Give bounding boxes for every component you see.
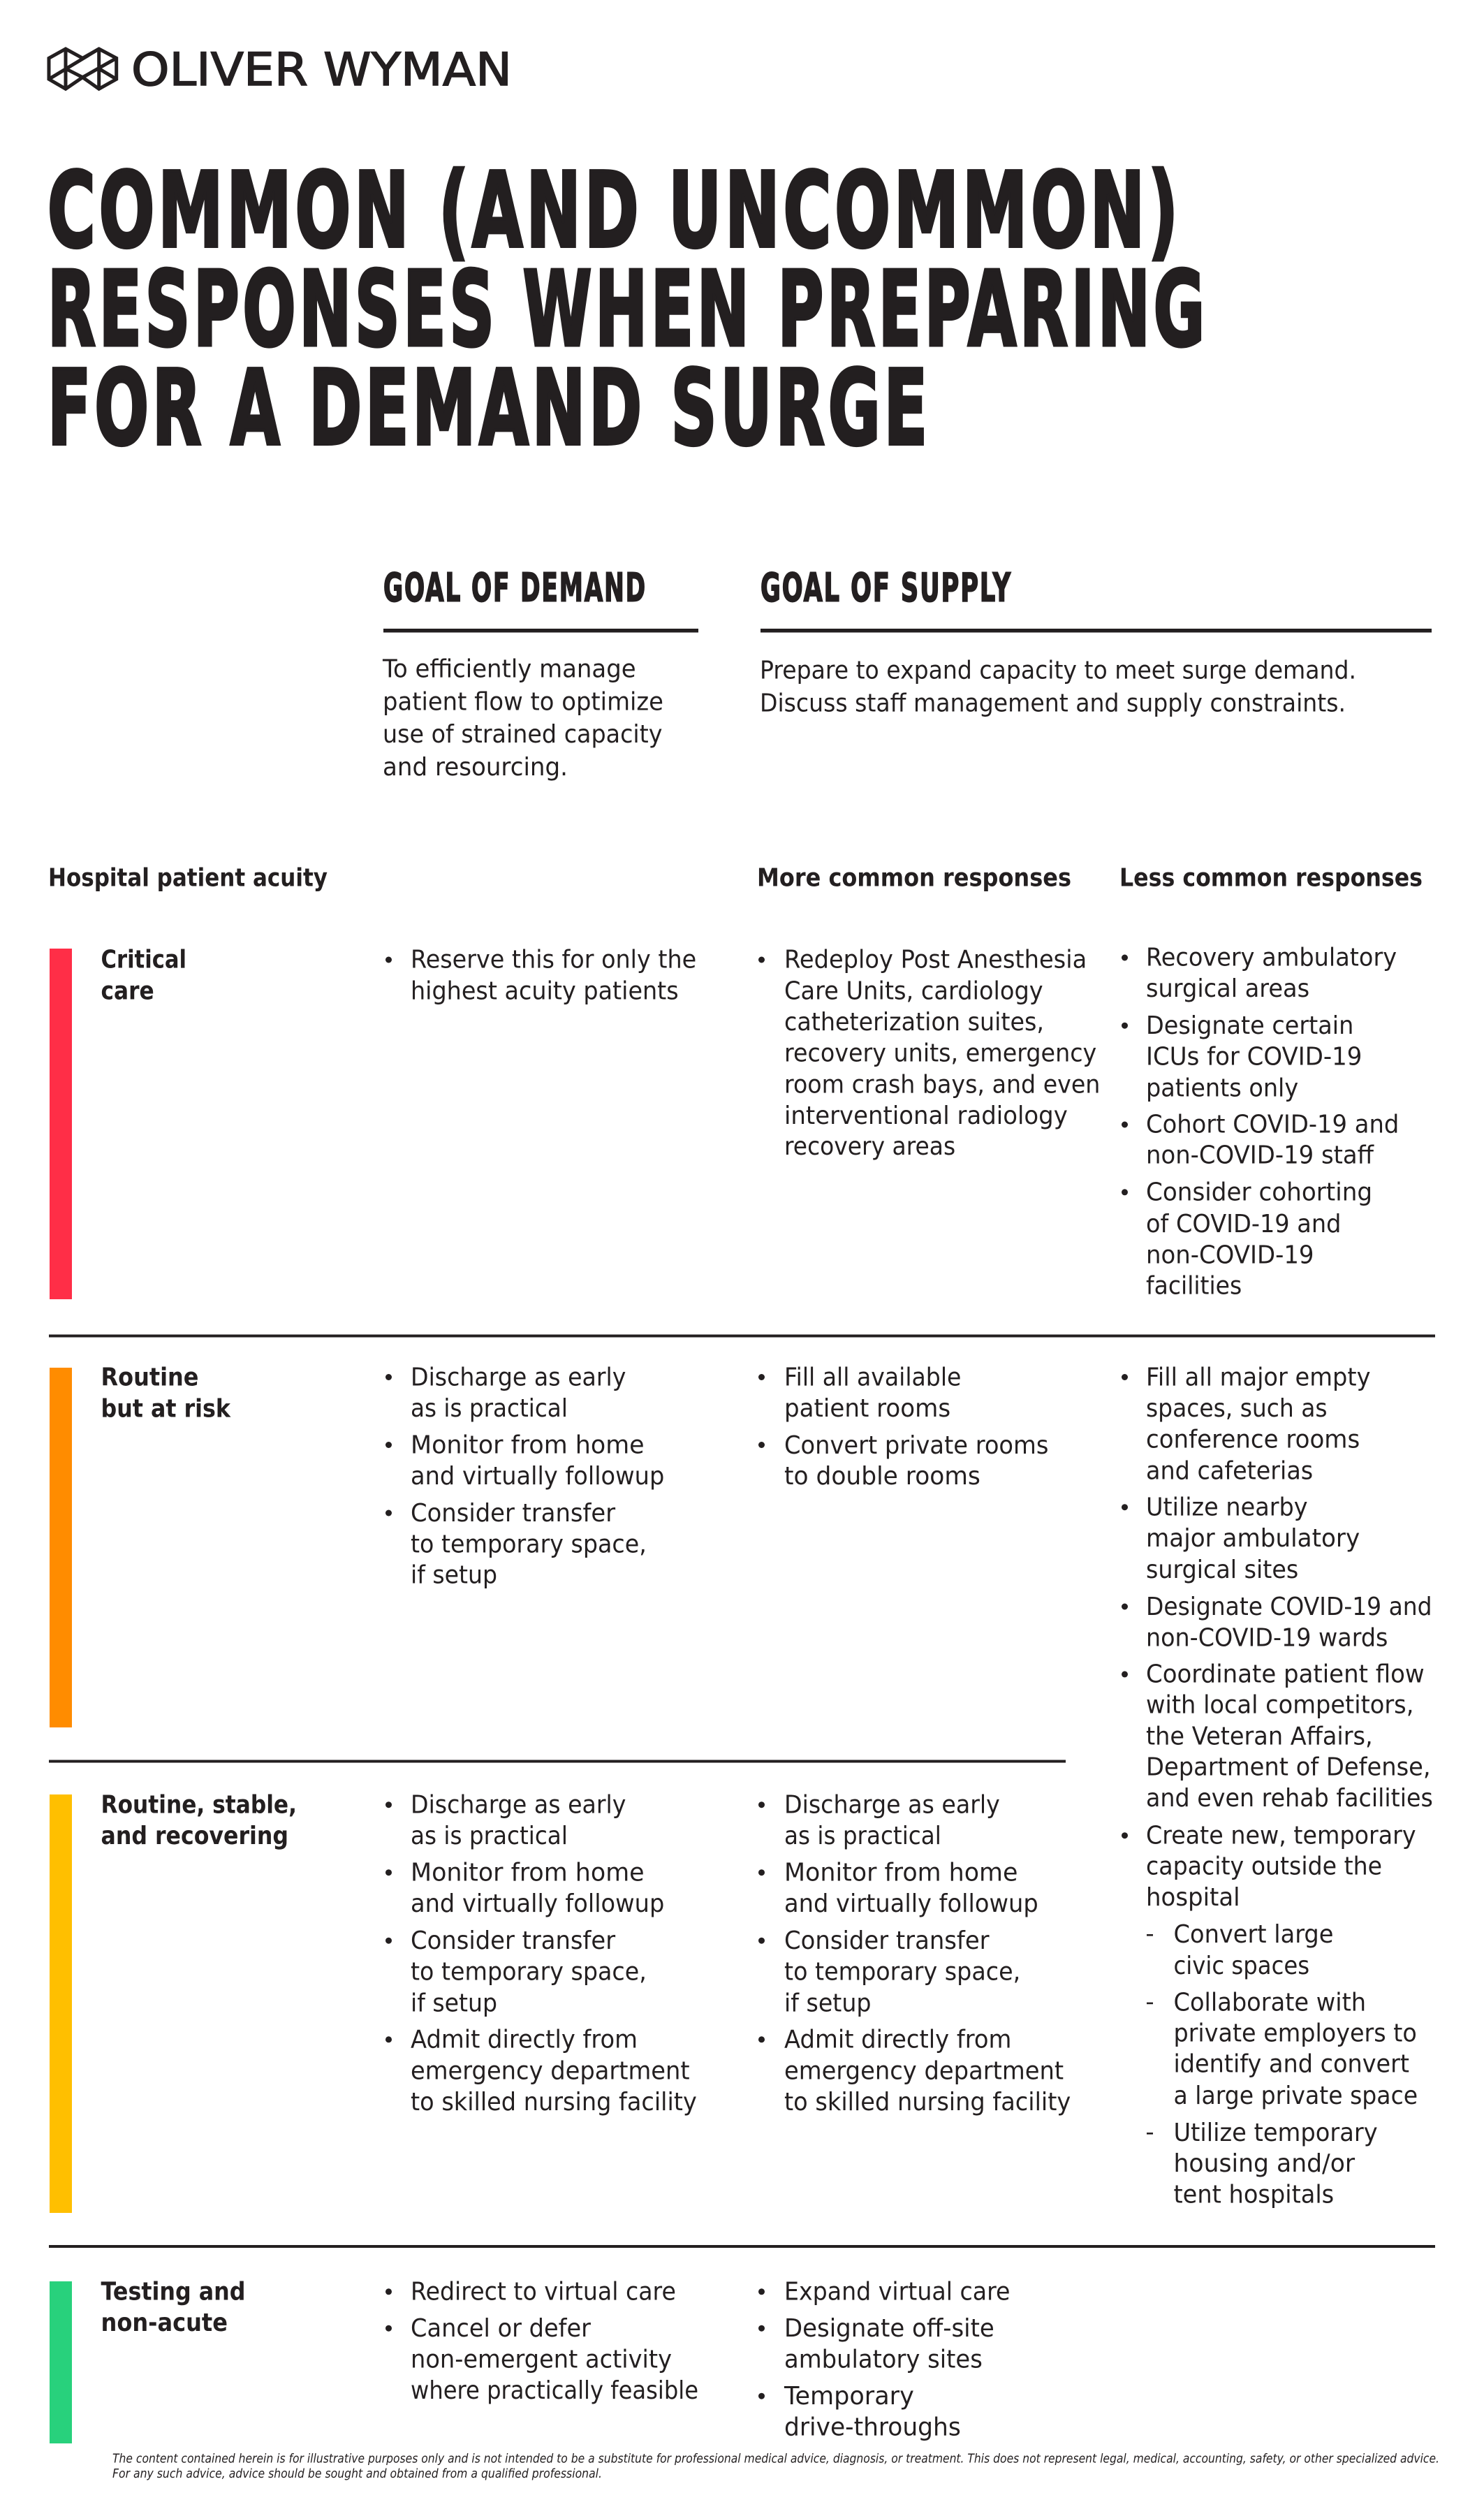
less common responses: routine rows (spans routine but at risk and routine, stable): and even rehab facilities <box>1146 1784 1433 1813</box>
wordmark: OLIVER WYMAN <box>131 44 512 96</box>
column header: goal of demand: and resourcing. <box>383 753 568 782</box>
more common responses: routine, stable, and recovering <box>758 1791 1071 2117</box>
title <box>47 151 1208 468</box>
demand list: routine but at risk: to temporary space, <box>411 1530 647 1559</box>
row label: routine but at risk: Routine <box>101 1363 198 1391</box>
less common responses: critical care: non-COVID-19 <box>1146 1241 1314 1270</box>
more common responses: testing and non-acute <box>758 2278 1010 2442</box>
demand list: routine but at risk: Consider transfer <box>411 1499 615 1528</box>
row label: critical care: Critical <box>101 946 186 974</box>
demand list: critical care: highest acuity patients <box>411 977 679 1005</box>
more common responses: routine, stable, and recovering: Admit directly from <box>784 2026 1011 2054</box>
row label: critical care: care <box>101 977 154 1005</box>
more common responses: critical care: recovery units, emergency <box>784 1039 1096 1068</box>
sub-list: temporary capacity options: Utilize temporary <box>1173 2119 1378 2147</box>
more common responses: routine, stable, and recovering: Discharge as early <box>784 1791 1000 1819</box>
less common responses: critical care: facilities <box>1146 1272 1242 1301</box>
demand list: routine, stable, and recovering: Discharge as early <box>411 1791 626 1819</box>
more common responses: routine, stable, and recovering: as is practical <box>784 1822 941 1850</box>
more common responses: routine, stable, and recovering: if setup <box>784 1989 872 2017</box>
less common responses: critical care: ICUs for COVID-19 <box>1146 1043 1362 1072</box>
less common responses: critical care: surgical areas <box>1146 974 1309 1003</box>
less common responses: routine rows (spans routine but at risk and routine, stable): the Veteran Affairs, <box>1146 1722 1373 1750</box>
more common responses: routine but at risk: patient rooms <box>784 1394 950 1423</box>
row label: testing and non-acute <box>101 2278 246 2337</box>
demand list: routine but at risk: Discharge as early <box>411 1363 626 1391</box>
sub-header: hospital patient acuity: Hospital patient acuity <box>48 864 328 893</box>
less common responses: routine rows (spans routine but at risk and routine, stable): spaces, such as <box>1146 1394 1328 1423</box>
sub-list: temporary capacity options: tent hospitals <box>1173 2181 1334 2209</box>
more common responses: critical care: catheterization suites, <box>784 1008 1044 1037</box>
demand list: critical care <box>385 946 696 1005</box>
footnote disclaimer <box>112 2452 1439 2481</box>
acuity bar: testing and non-acute (green) <box>50 2281 72 2443</box>
less common responses: routine rows (spans routine but at risk and routine, stable): and cafeterias <box>1146 1456 1313 1485</box>
sub-list: temporary capacity options: civic spaces <box>1173 1952 1309 1980</box>
less common responses: routine rows (spans routine but at risk and routine, stable): Fill all major empty <box>1146 1363 1370 1391</box>
column header: goal of demand: GOAL OF DEMAND <box>383 566 647 611</box>
demand list: routine, stable, and recovering: if setup <box>411 1989 497 2017</box>
more common responses: routine but at risk: Convert private rooms <box>784 1431 1048 1460</box>
less common responses: critical care <box>1122 943 1399 1301</box>
demand list: routine, stable, and recovering: to skilled nursing facility <box>411 2088 697 2117</box>
more common responses: routine, stable, and recovering: Monitor from home <box>784 1858 1018 1887</box>
column header: goal of supply: Prepare to expand capacity to meet surge demand. <box>760 656 1356 685</box>
sub-header: less common responses: Less common responses <box>1119 864 1423 893</box>
acuity bar: routine but at risk (orange) <box>50 1368 72 1727</box>
more common responses: routine but at risk <box>758 1363 1048 1491</box>
more common responses: routine, stable, and recovering: Consider transfer <box>784 1927 990 1955</box>
demand list: routine but at risk: as is practical <box>411 1394 568 1423</box>
more common responses: routine, stable, and recovering: to temporary space, <box>784 1958 1020 1987</box>
less common responses: critical care: of COVID-19 and <box>1146 1210 1341 1238</box>
less common responses: routine rows (spans routine but at risk and routine, stable): conference rooms <box>1146 1426 1360 1454</box>
demand list: testing and non-acute: Redirect to virtual care <box>411 2278 676 2306</box>
sub-list: temporary capacity options: housing and/or <box>1173 2149 1355 2178</box>
demand list: testing and non-acute: where practically feasible <box>411 2376 698 2405</box>
demand list: testing and non-acute <box>385 2278 698 2405</box>
less common responses: routine rows (spans routine but at risk and routine, stable): Designate COVID-19 and <box>1146 1593 1432 1621</box>
more common responses: critical care: recovery areas <box>784 1132 955 1161</box>
column header: goal of supply: GOAL OF SUPPLY <box>761 566 1012 611</box>
more common responses: routine, stable, and recovering: emergency department <box>784 2056 1064 2085</box>
sub-list: temporary capacity options: identify and convert <box>1173 2050 1409 2079</box>
more common responses: testing and non-acute: Designate off-site <box>784 2314 994 2343</box>
more common responses: routine, stable, and recovering: and virtually followup <box>784 1889 1038 1918</box>
more common responses: routine but at risk: to double rooms <box>784 1462 980 1491</box>
less common responses: routine rows (spans routine but at risk and routine, stable): major ambulatory <box>1146 1524 1360 1553</box>
demand list: routine, stable, and recovering: Consider transfer <box>411 1927 615 1955</box>
column header: goal of demand: use of strained capacity <box>383 720 662 749</box>
more common responses: critical care <box>758 946 1100 1161</box>
less common responses: critical care: Designate certain <box>1146 1011 1353 1040</box>
footnote disclaimer: For any such advice, advice should be sought and obtained from a qualified professional. <box>112 2466 602 2481</box>
column header: goal of supply: Discuss staff management and supply constraints. <box>760 689 1346 717</box>
less common responses: routine rows (spans routine but at risk and routine, stable): Create new, temporary <box>1146 1822 1416 1850</box>
demand list: routine, stable, and recovering: Monitor from home <box>411 1858 645 1887</box>
less common responses: routine rows (spans routine but at risk and routine, stable) <box>1122 1363 1433 2209</box>
less common responses: critical care: Cohort COVID-19 and <box>1146 1111 1399 1139</box>
row label: routine, stable, and recovering <box>101 1791 297 1850</box>
demand list: routine, stable, and recovering: as is practical <box>411 1822 568 1850</box>
less common responses: routine rows (spans routine but at risk and routine, stable): with local competitors, <box>1146 1691 1413 1720</box>
sub-header: more common responses: More common responses <box>757 864 1071 893</box>
row label: testing and non-acute: non-acute <box>101 2309 228 2337</box>
demand list: routine, stable, and recovering: Admit directly from <box>411 2026 638 2054</box>
demand list: routine but at risk <box>385 1363 664 1590</box>
less common responses: routine rows (spans routine but at risk and routine, stable): hospital <box>1146 1883 1240 1912</box>
more common responses: critical care: room crash bays, and even <box>784 1070 1100 1099</box>
column header: goal of demand: To efficiently manage <box>382 655 636 683</box>
acuity bar: routine, stable, and recovering (yellow) <box>50 1794 72 2213</box>
demand list: routine, stable, and recovering: and virtually followup <box>411 1889 664 1918</box>
sub-list: temporary capacity options <box>1147 1920 1418 2209</box>
more common responses: testing and non-acute: Temporary <box>784 2382 914 2411</box>
demand list: routine, stable, and recovering <box>385 1791 697 2117</box>
column header: goal of demand: patient flow to optimize <box>383 687 663 716</box>
demand list: routine but at risk: Monitor from home <box>411 1431 645 1459</box>
demand list: routine but at risk: and virtually followup <box>411 1462 664 1491</box>
less common responses: routine rows (spans routine but at risk and routine, stable): non-COVID-19 wards <box>1146 1623 1388 1652</box>
less common responses: routine rows (spans routine but at risk and routine, stable): Utilize nearby <box>1146 1493 1308 1521</box>
row label: critical care <box>101 946 186 1005</box>
row label: routine, stable, and recovering: Routine, stable, <box>101 1791 297 1819</box>
less common responses: critical care: Consider cohorting <box>1146 1178 1372 1207</box>
demand list: testing and non-acute: non-emergent activity <box>411 2346 672 2374</box>
less common responses: critical care: patients only <box>1146 1074 1298 1102</box>
less common responses: critical care: Recovery ambulatory <box>1146 943 1397 972</box>
sub-list: temporary capacity options: a large private space <box>1173 2082 1418 2110</box>
sub-list: temporary capacity options: Collaborate with <box>1173 1989 1366 2017</box>
row label: routine but at risk <box>101 1363 231 1424</box>
less common responses: routine rows (spans routine but at risk and routine, stable): surgical sites <box>1146 1556 1298 1584</box>
logo: Oliver Wyman <box>49 44 512 96</box>
demand list: testing and non-acute: Cancel or defer <box>411 2314 591 2343</box>
row label: routine but at risk: but at risk <box>101 1395 231 1424</box>
demand list: routine but at risk: if setup <box>411 1560 497 1590</box>
title: FOR A DEMAND SURGE <box>47 348 931 468</box>
row label: routine, stable, and recovering: and recovering <box>101 1822 288 1850</box>
more common responses: routine but at risk: Fill all available <box>784 1363 961 1391</box>
column header: goal of supply <box>760 566 1432 717</box>
demand list: routine, stable, and recovering: emergency department <box>411 2056 690 2085</box>
more common responses: critical care: Redeploy Post Anesthesia <box>784 946 1087 974</box>
demand list: routine, stable, and recovering: to temporary space, <box>411 1958 647 1987</box>
less common responses: routine rows (spans routine but at risk and routine, stable): capacity outside the <box>1146 1852 1382 1880</box>
sub-list: temporary capacity options: private employers to <box>1173 2019 1417 2048</box>
row label: testing and non-acute: Testing and <box>101 2278 246 2306</box>
more common responses: critical care: interventional radiology <box>784 1102 1068 1130</box>
less common responses: routine rows (spans routine but at risk and routine, stable): Coordinate patient flow <box>1146 1660 1425 1689</box>
less common responses: critical care: non-COVID-19 staff <box>1146 1141 1374 1170</box>
more common responses: testing and non-acute: Expand virtual care <box>784 2278 1010 2306</box>
icon: hexagon mark <box>49 49 117 89</box>
more common responses: testing and non-acute: drive-throughs <box>784 2413 961 2442</box>
less common responses: routine rows (spans routine but at risk and routine, stable): Department of Defense, <box>1146 1753 1431 1781</box>
column header: goal of demand <box>382 566 698 782</box>
more common responses: testing and non-acute: ambulatory sites <box>784 2346 983 2374</box>
acuity bar: critical care (red) <box>50 949 72 1299</box>
more common responses: critical care: Care Units, cardiology <box>784 977 1043 1005</box>
sub-list: temporary capacity options: Convert large <box>1173 1920 1334 1949</box>
more common responses: routine, stable, and recovering: to skilled nursing facility <box>784 2088 1071 2117</box>
demand list: critical care: Reserve this for only the <box>411 946 696 974</box>
